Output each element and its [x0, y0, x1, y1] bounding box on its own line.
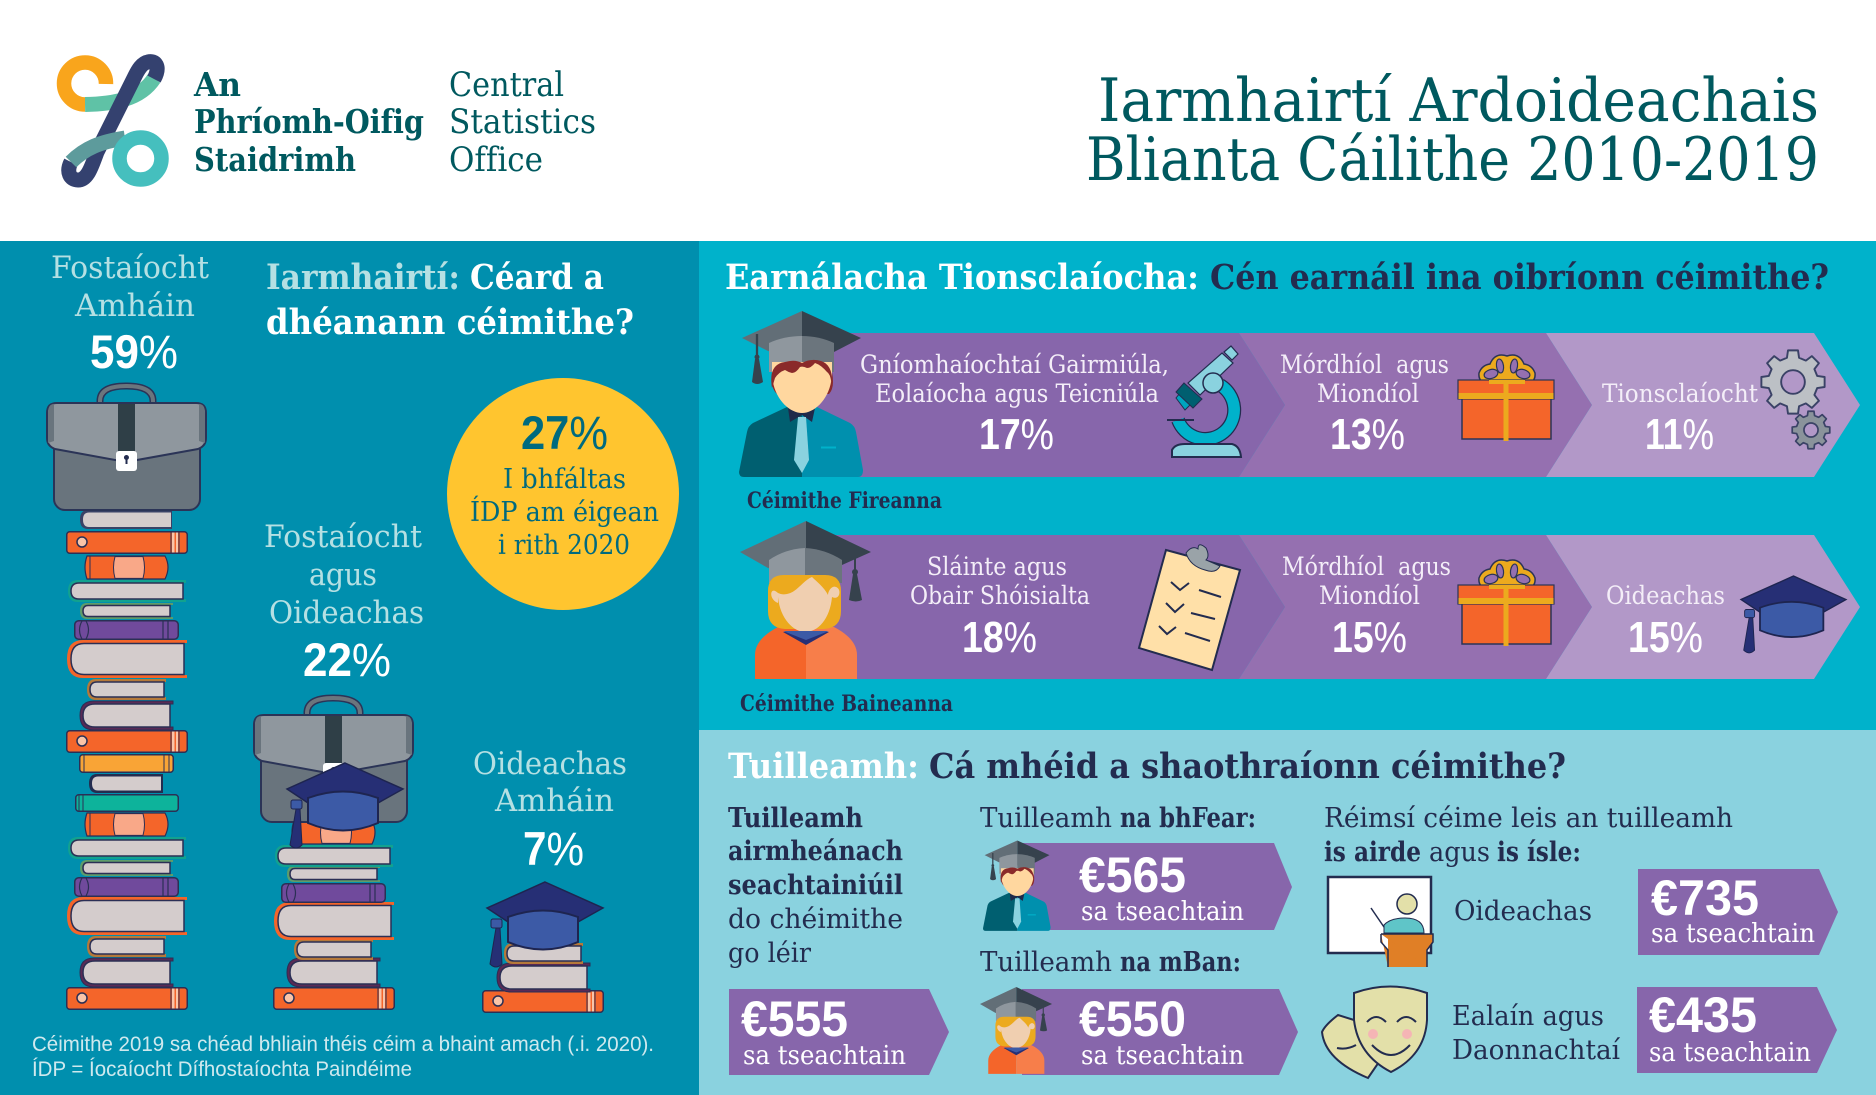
highest and lowest fields label: Réimsí céime leis an tuilleamh — [1324, 803, 1733, 834]
icon: microscope — [1167, 346, 1241, 457]
sector: wholesale and retail: Mórdhíol agus — [1282, 552, 1451, 581]
icon: male graduate small — [983, 840, 1051, 931]
arrow: arts earnings: sa tseachtain — [1649, 1038, 1811, 1068]
panel: outcomes — [0, 241, 699, 1095]
arrow: male earnings: €565 — [1079, 847, 1186, 903]
education only label: 7% — [523, 822, 584, 875]
sector: education: Oideachas — [1606, 581, 1725, 610]
field: arts and humanities: Ealaín agus — [1452, 1001, 1604, 1032]
organisation name in English: Central — [449, 65, 564, 105]
sector: education: 15% — [1628, 613, 1703, 662]
employment and education label — [264, 519, 424, 686]
sector: wholesale and retail: 15% — [1332, 613, 1407, 662]
male earnings label: Tuilleamh — [980, 803, 1112, 834]
outcomes heading: Iarmhairtí: — [266, 257, 460, 298]
outcomes heading: Céard a — [470, 257, 604, 298]
education only label — [473, 746, 627, 875]
organisation name in English: Statistics — [449, 102, 596, 142]
sector: industry: Tionsclaíocht — [1602, 379, 1758, 408]
arrow: arts earnings — [1637, 987, 1837, 1073]
callout: PUP payment circle: I bhfáltas — [503, 464, 626, 495]
sector: health and social work: 18% — [962, 613, 1037, 662]
icon: clipboard — [1139, 545, 1240, 670]
sector: wholesale and retail: Miondíol — [1317, 379, 1419, 408]
icon: female graduate small — [980, 987, 1052, 1074]
footnote — [32, 1033, 654, 1081]
callout: PUP payment circle: i rith 2020 — [498, 530, 630, 561]
earnings heading: Cá mhéid a shaothraíonn céimithe? — [929, 746, 1566, 787]
outcomes heading — [266, 257, 634, 343]
employment and education label: 22% — [303, 633, 391, 686]
average weekly earnings text — [728, 803, 903, 969]
sector: professional activities — [860, 350, 1169, 459]
icon: gears — [1761, 350, 1830, 449]
female graduates arrow row — [740, 521, 1860, 679]
male graduates arrow row — [739, 311, 1860, 477]
sector: wholesale and retail: Miondíol — [1319, 581, 1420, 610]
title — [1086, 66, 1819, 195]
icon: graduation cap — [1741, 576, 1846, 653]
icon: gift box — [1458, 355, 1554, 441]
icon: briefcase on tall book stack — [47, 386, 206, 1009]
sector: professional activities: 17% — [979, 410, 1054, 459]
callout: PUP payment circle — [447, 378, 679, 610]
average weekly earnings text: Tuilleamh — [728, 803, 863, 834]
organisation name in Irish: Staidrimh — [194, 140, 356, 179]
employment and education label: Oideachas — [269, 595, 424, 631]
highest and lowest fields label: is ísle: — [1497, 837, 1581, 868]
arrow: all graduates earnings: €555 — [741, 991, 848, 1047]
sector: wholesale and retail — [1282, 552, 1451, 662]
arrow: female earnings — [1022, 989, 1298, 1075]
earnings heading: Tuilleamh: — [728, 746, 919, 787]
sector: professional activities: Eolaíocha agus Teicniúla — [875, 379, 1159, 408]
male earnings label — [980, 803, 1256, 834]
footnote: Céimithe 2019 sa chéad bhliain théis céim a bhaint amach (.i. 2020). — [32, 1033, 654, 1056]
arrow: female earnings: sa tseachtain — [1081, 1041, 1244, 1071]
female earnings label: Tuilleamh — [980, 947, 1112, 978]
panel: earnings — [699, 730, 1876, 1095]
organisation name in Irish: Phríomh-Oifig — [194, 102, 424, 141]
arrow: male earnings — [1022, 843, 1292, 930]
panel: industrial sectors — [699, 241, 1876, 730]
sectors heading: Earnálacha Tionsclaíocha: — [725, 257, 1199, 298]
female earnings label — [980, 947, 1241, 978]
title: Iarmhairtí Ardoideachais — [1098, 66, 1819, 136]
footnote: ÍDP = Íocaíocht Dífhostaíochta Paindéime — [32, 1058, 412, 1081]
sector: wholesale and retail: 13% — [1330, 410, 1405, 459]
arrow: female earnings: €550 — [1079, 991, 1186, 1047]
arrow: education earnings: €735 — [1651, 870, 1759, 926]
outcomes heading: dhéanann céimithe? — [266, 302, 634, 343]
arrow: male earnings: sa tseachtain — [1081, 897, 1244, 927]
education only label: Amháin — [494, 783, 614, 819]
organisation name in English: Office — [449, 140, 543, 180]
female earnings label: na mBan: — [1120, 947, 1241, 978]
sector: wholesale and retail: Mórdhíol agus — [1280, 350, 1449, 379]
arrow: education earnings: sa tseachtain — [1651, 919, 1815, 949]
arrow: arts earnings: €435 — [1649, 987, 1757, 1043]
field: education: Oideachas — [1454, 896, 1592, 927]
icon: female graduate — [740, 521, 871, 679]
sector: health and social work: Sláinte agus — [927, 552, 1067, 581]
arrow: education earnings — [1638, 869, 1838, 955]
icon: teacher at board — [1328, 877, 1433, 967]
icon: briefcase and cap on medium book stack — [254, 698, 413, 1009]
education only label: Oideachas — [473, 746, 627, 782]
employment only label: 59% — [90, 325, 178, 378]
arrow: all graduates earnings: sa tseachtain — [743, 1041, 906, 1071]
sector: wholesale and retail — [1280, 350, 1449, 459]
logo — [64, 62, 162, 180]
average weekly earnings text: airmheánach — [728, 836, 903, 867]
employment and education label: agus — [309, 557, 377, 593]
sector: industry: 11% — [1645, 410, 1714, 459]
icon: male graduate — [739, 311, 863, 477]
callout: PUP payment circle: 27% — [521, 406, 608, 459]
highest and lowest fields label: is airde — [1324, 837, 1421, 868]
average weekly earnings text: seachtainiúil — [728, 870, 903, 901]
highest and lowest fields label: agus — [1429, 837, 1490, 868]
sectors heading — [725, 257, 1829, 298]
arrow: all graduates earnings — [729, 989, 949, 1075]
callout: PUP payment circle: ÍDP am éigean — [470, 495, 659, 528]
header band — [0, 0, 1876, 241]
field: arts and humanities: Daonnachtaí — [1452, 1035, 1620, 1066]
icon: gift box — [1458, 560, 1554, 646]
field: arts and humanities — [1452, 1001, 1620, 1066]
sector: professional activities: Gníomhaíochtaí Gairmiúla, — [860, 350, 1169, 379]
average weekly earnings text: do chéimithe — [728, 904, 903, 935]
sectors heading: Cén earnáil ina oibríonn céimithe? — [1210, 257, 1829, 298]
organisation name in Irish — [193, 65, 424, 179]
icon: theatre masks — [1322, 986, 1427, 1078]
sector: industry — [1602, 379, 1758, 459]
female graduates label: Céimithe Baineanna — [740, 691, 953, 717]
employment only label: Fostaíocht — [51, 250, 210, 286]
icon: cap on short book stack — [483, 882, 603, 1012]
sector: health and social work — [910, 552, 1090, 662]
employment only label — [51, 250, 210, 378]
organisation name in English — [449, 65, 596, 180]
organisation name in Irish: An — [193, 65, 241, 104]
male earnings label: na bhFear: — [1120, 803, 1256, 834]
sector: health and social work: Obair Shóisialta — [910, 581, 1090, 610]
sector: education — [1606, 581, 1725, 662]
employment only label: Amháin — [74, 288, 195, 324]
employment and education label: Fostaíocht — [264, 519, 423, 555]
highest and lowest fields label — [1324, 803, 1733, 868]
average weekly earnings text: go léir — [728, 938, 811, 969]
male graduates label: Céimithe Fireanna — [747, 488, 942, 514]
